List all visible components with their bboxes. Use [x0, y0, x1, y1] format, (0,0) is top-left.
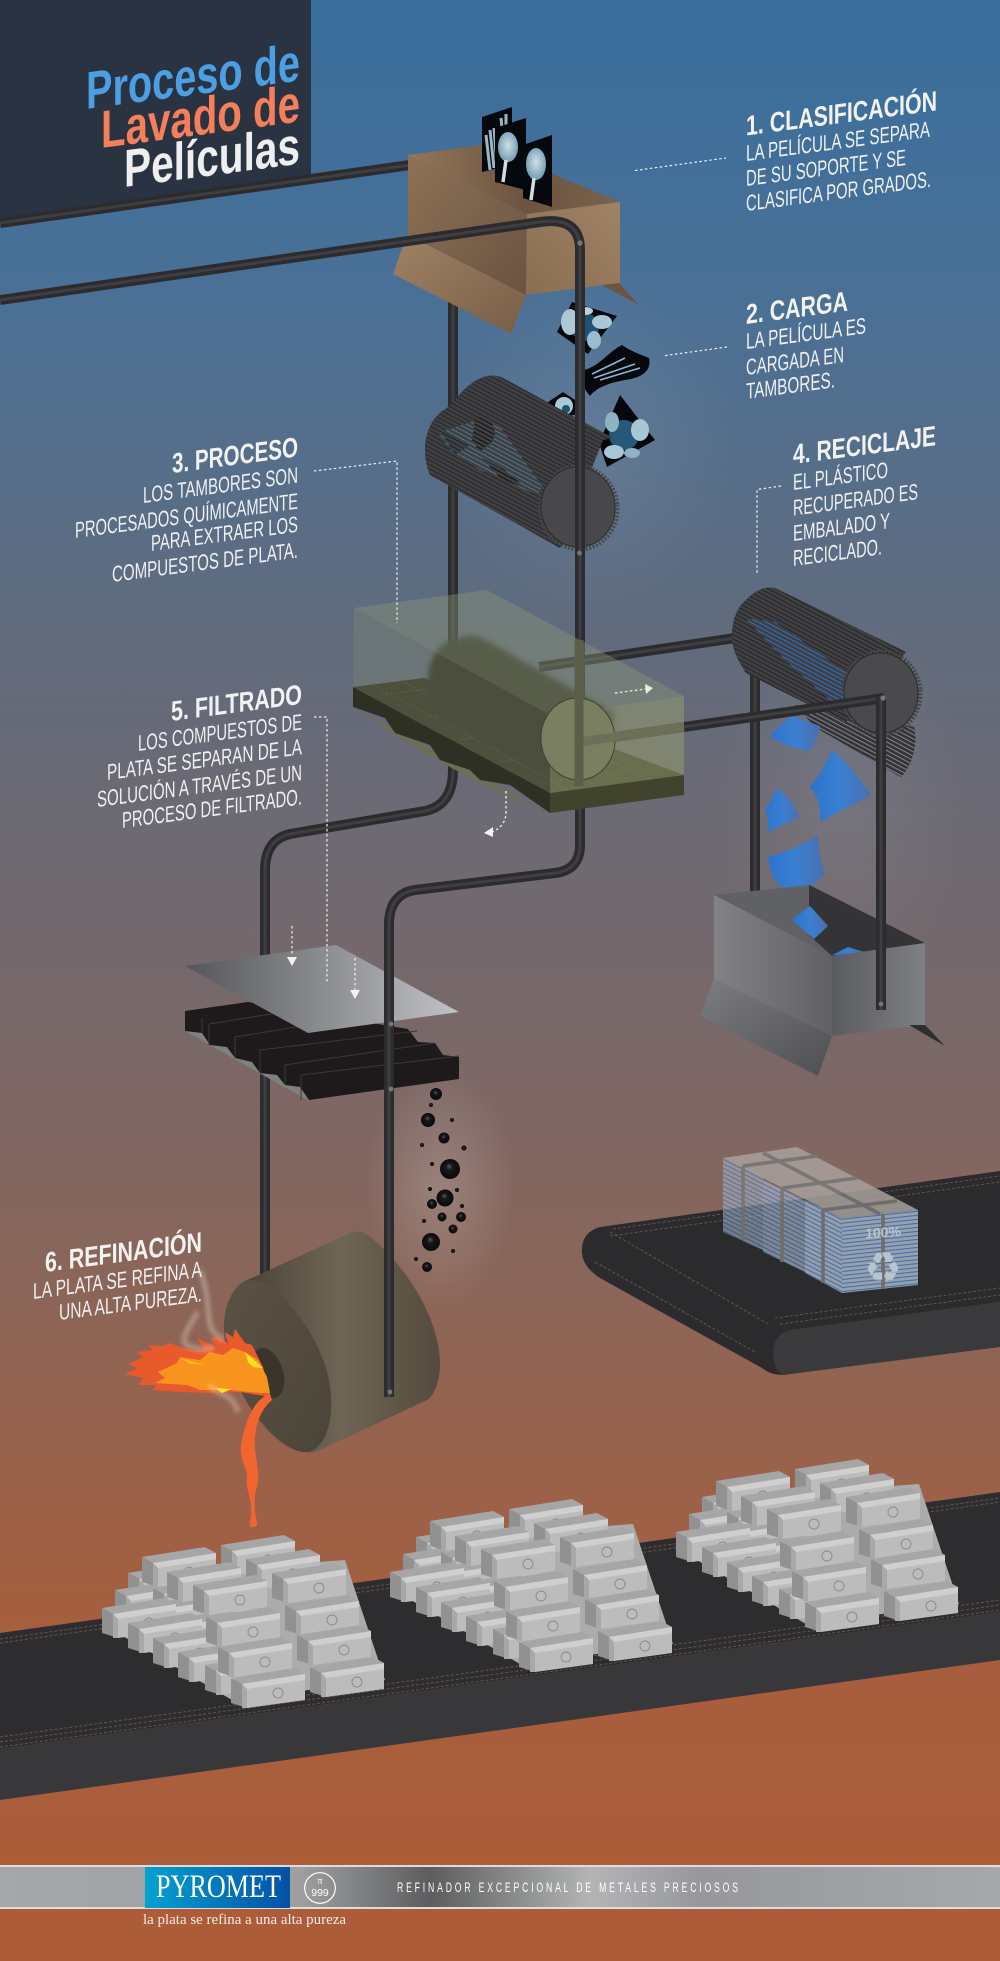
glow behind droplets: [365, 1062, 515, 1312]
filter: corrugated block: [185, 1002, 459, 1101]
bale straps: [743, 1153, 897, 1289]
silver droplets: [414, 1088, 466, 1272]
silver bars pile 1: [102, 1535, 385, 1708]
title: Películas: [124, 117, 300, 199]
tank outflow arrow down: [484, 791, 506, 837]
step 5: [97, 679, 327, 982]
falling film: hand x-ray: [582, 345, 649, 396]
step 2: TAMBORES.: [746, 367, 835, 404]
step 2: LA PELÍCULA ES: [746, 313, 866, 354]
furnace drum: [224, 1232, 440, 1453]
step 6: 6. REFINACIÓN: [45, 1226, 202, 1278]
purity stamp: [305, 1873, 335, 1903]
pipe: front rail and vertical: [0, 221, 583, 1397]
silver bars pile 2: [390, 1499, 673, 1672]
title: [86, 34, 300, 199]
silver bars pile 3: [676, 1459, 959, 1632]
tagline: la plata se refina a una alta pureza: [143, 1912, 346, 1928]
glow behind drum: [440, 270, 740, 610]
step 2: [665, 286, 866, 404]
step 3: COMPUESTOS DE PLATA.: [112, 538, 298, 587]
step 6: UNA ALTA PUREZA.: [59, 1281, 202, 1325]
step 4: [757, 420, 936, 574]
processing drum 1: [425, 376, 621, 553]
fire: [125, 1329, 270, 1397]
step 4: RECUPERADO ES: [793, 479, 918, 521]
step 5: LOS COMPUESTOS DE: [138, 709, 302, 756]
step 1: [635, 85, 937, 216]
slogan: REFINADOR EXCEPCIONAL DE METALES PRECIOSOS: [397, 1880, 738, 1896]
x-ray sheets: [482, 107, 552, 207]
title: Lavado de: [101, 75, 300, 160]
falling film: small piece behind drum: [548, 392, 575, 416]
cardboard box: [393, 107, 639, 334]
step 3: [75, 432, 397, 623]
step 1: 1. CLASIFICACIÓN: [746, 85, 937, 141]
filter: silver plate: [185, 945, 459, 1033]
title panel: [0, 0, 311, 219]
step 2: 2. CARGA: [746, 286, 848, 330]
filter arrows: [287, 926, 360, 999]
pipe: recycle rear vertical: [750, 660, 760, 895]
step 5: PROCESO DE FILTRADO.: [122, 784, 302, 833]
smoke: [184, 1270, 238, 1412]
glow behind recycle drum: [710, 610, 970, 990]
pipe: rear vertical: [265, 300, 453, 1290]
step 6: LA PLATA SE REFINA A: [33, 1257, 203, 1304]
recycle icon: ♻: [864, 1243, 902, 1292]
chemical tank: [353, 590, 684, 793]
purity stamp: π: [317, 1876, 323, 1887]
pipe: recycle rear rail: [539, 638, 735, 667]
title: Proceso de: [86, 34, 300, 121]
submerged drum: [428, 636, 615, 780]
step 3: PROCESADOS QUÍMICAMENTE: [75, 489, 298, 543]
purity stamp: 999: [311, 1887, 329, 1899]
drum cap in tank: [538, 695, 618, 783]
recycle drum: [732, 588, 924, 738]
recycle conveyor: [582, 1171, 1000, 1375]
step 3: PARA EXTRAER LOS: [151, 512, 298, 556]
step 4: 4. RECICLAJE: [793, 420, 936, 470]
gray bin: [700, 885, 945, 1076]
recycle drum lower ribs: [795, 705, 915, 777]
logo: PYROMET: [156, 1869, 281, 1905]
bale label: 100%: [865, 1223, 901, 1242]
tank liquid base: [353, 678, 684, 815]
pipe: recycle front vertical: [879, 695, 886, 1010]
step 6: [33, 1226, 203, 1325]
main conveyor belt: [0, 1492, 1000, 1800]
molten silver stream: [241, 1394, 272, 1527]
blue plastic pieces: [765, 716, 871, 898]
step 5: PLATA SE SEPARAN DE LA: [107, 734, 303, 785]
step 3: 3. PROCESO: [172, 432, 298, 479]
tank outflow arrow right: [615, 684, 653, 694]
falling film: chest x-ray: [599, 395, 655, 467]
step 4: EMBALADO Y: [793, 508, 890, 546]
falling film: pelvis x-ray: [557, 302, 617, 354]
step 1: DE SU SOPORTE Y SE: [746, 145, 906, 191]
pipe: recycle front rail: [580, 698, 884, 742]
step 4: RECICLADO.: [793, 534, 882, 571]
step 4: EL PLÁSTICO: [793, 458, 888, 495]
pipe: back rail: [0, 165, 410, 223]
step 3: LOS TAMBORES SON: [143, 463, 298, 508]
step 5: SOLUCIÓN A TRAVÉS DE UN: [97, 760, 302, 812]
footer band: [0, 1865, 1000, 1909]
step 2: CARGADA EN: [746, 342, 844, 380]
plastic bale: [723, 1147, 918, 1293]
plastic in bin: [792, 906, 864, 956]
step 5: 5. FILTRADO: [171, 679, 302, 727]
